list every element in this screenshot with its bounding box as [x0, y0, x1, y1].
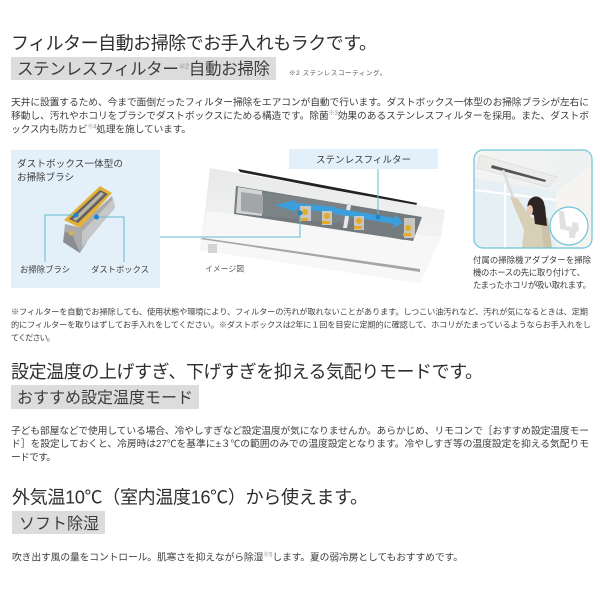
illustration: indoor ceiling unit	[200, 168, 445, 283]
footnotes: cleaning notes: ※フィルターを自動でお掃除しても、使用状態や環境により、フィルターの汚れが取れないことがあります。しつこい油汚れなど、汚れが気になるときは、定期	[11, 306, 588, 316]
footnotes: cleaning notes: 的にフィルターを取りはずしてお手入れをしてください。※ダストボックスは2年に１回を目安に定期的に確認して、ホコリがたまっているようならお手入れをし	[11, 320, 591, 330]
body text: filter description: ックス内も防カビ	[11, 124, 88, 136]
label: stainless filter: ステンレスフィルター	[316, 155, 411, 166]
footnote: stainless coating: ※2 ステンレスコーティング。	[289, 68, 386, 77]
brush carriages	[300, 206, 415, 238]
body text: recommended temperature: ド］を設定しておくと、冷房時は27℃を基準に±３℃の範囲のみでの温度設定となります。冷やしすぎ等の温度設定を抑える気配りモ	[11, 437, 589, 450]
body text: recommended temperature	[11, 424, 589, 464]
caption: image illustration: イメージ図	[205, 264, 244, 274]
panel title	[17, 158, 123, 184]
body text: soft dehumidify: ※5	[263, 552, 273, 558]
panel: dust box integrated brush	[11, 150, 160, 288]
label: dust box: ダストボックス	[91, 264, 149, 274]
filter arrows	[275, 200, 403, 228]
body text: filter description: 移動し、汚れやホコリをブラシでダストボックスにためる構造です。除菌	[11, 111, 329, 122]
caption: vacuum adapter: 機のホースの先に取り付けて、	[473, 268, 585, 278]
caption: vacuum adapter: 付属の掃除機アダプターを掃除	[473, 255, 592, 265]
caption: vacuum adapter: たまったホコリが吸い取れます。	[473, 280, 591, 290]
callout dots	[74, 212, 99, 220]
callout lines	[45, 215, 124, 262]
title: filter auto clean: フィルター自動お掃除でお手入れもラクです。	[11, 34, 377, 54]
panel title: お掃除ブラシ	[17, 172, 74, 184]
panel title: ダストボックス一体型の	[17, 158, 123, 170]
title: outdoor temperature: 外気温10℃（室内温度16℃）から使えます。	[12, 488, 368, 508]
woman	[510, 197, 544, 248]
heading badge: recommended temperature mode: おすすめ設定温度モード	[17, 389, 193, 407]
illustration: brush and dust box unit	[63, 186, 115, 253]
photo frame	[474, 150, 592, 248]
connector: brush panel to unit	[160, 210, 302, 237]
footnotes: cleaning notes	[11, 306, 591, 342]
label: brush: お掃除ブラシ	[20, 264, 70, 274]
vacuum pole	[503, 170, 514, 200]
heading badge: recommended temperature mode	[11, 385, 199, 409]
ceiling unit	[477, 155, 557, 187]
caption: vacuum adapter	[473, 255, 592, 290]
inset: adapter	[550, 207, 588, 245]
body text: filter description: ※3	[329, 110, 338, 117]
heading badge: soft dehumidify	[12, 511, 105, 534]
heading badge: stainless filter	[11, 57, 276, 80]
footnotes: cleaning notes: てください。	[11, 334, 55, 342]
heading badge: stainless filter: ステンレスフィルター	[17, 60, 179, 78]
body text: recommended temperature: 子ども部屋などで使用している場合、冷やしすぎなど設定温度が気になりませんか。あらかじめ、リモコンで［おすすめ設定温度モー	[11, 424, 589, 437]
body text: filter description: 天井に設置するため、今まで面倒だったフィルター掃除をエアコンが自動で行います。ダストボックス一体型のお掃除ブラシが左右に	[11, 96, 589, 108]
heading badge: stainless filter: ※2	[178, 62, 189, 70]
heading badge: soft dehumidify: ソフト除湿	[19, 515, 99, 533]
heading badge: stainless filter: 自動お掃除	[189, 60, 270, 78]
body text: filter description	[11, 96, 589, 136]
photo: cleaning with vacuum adapter	[474, 150, 592, 248]
body text: filter description: ※4	[87, 124, 97, 130]
body text: recommended temperature: ードです。	[11, 452, 56, 464]
label: stainless filter	[289, 149, 438, 169]
body text: soft dehumidify: します。夏の弱冷房としてもおすすめです。	[272, 552, 463, 564]
connector: filter label to unit	[376, 169, 380, 220]
body text: filter description: 効果のあるステンレスフィルターを採用。また、ダストボ	[338, 109, 589, 122]
body text: soft dehumidify: 吹き出す風の量をコントロール。肌寒さを抑えながら除湿	[12, 552, 263, 564]
title: recommended temperature: 設定温度の上げすぎ、下げすぎを抑える気配りモードです。	[11, 362, 483, 382]
body text: filter description: 処理を施しています。	[96, 122, 191, 136]
